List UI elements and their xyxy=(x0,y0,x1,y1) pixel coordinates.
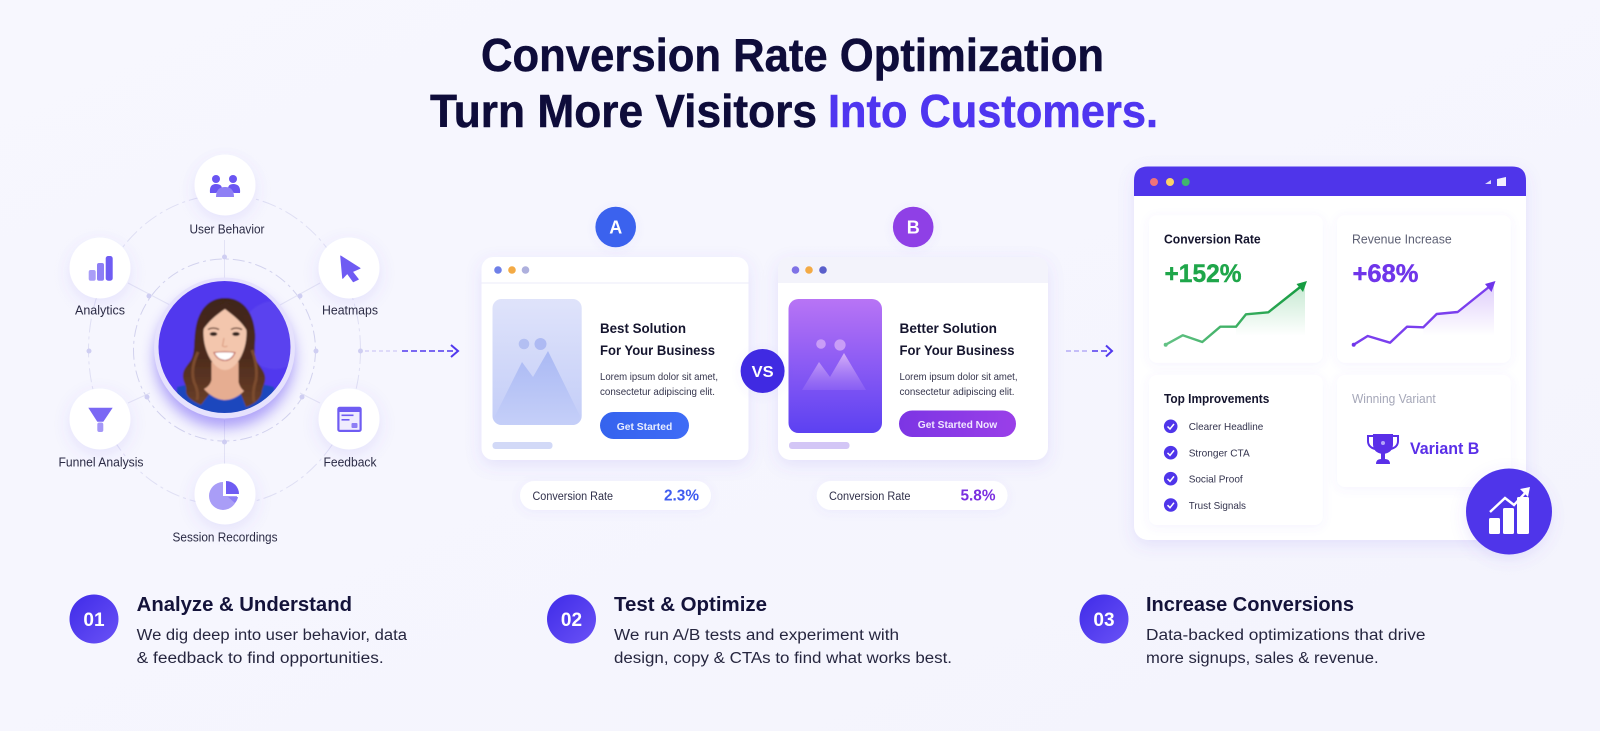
badge: A xyxy=(595,207,636,247)
step 2: Test & Optimize xyxy=(614,594,767,616)
headline A: Best Solution xyxy=(600,320,686,336)
title: Turn More Visitors xyxy=(430,85,817,137)
card: top improvements xyxy=(1149,375,1323,525)
number badge 01: 01 xyxy=(83,610,105,631)
card: revenue increase xyxy=(1337,215,1511,363)
step 3: Data-backed optimizations that drive xyxy=(1146,627,1426,644)
number badge 02: 02 xyxy=(561,610,582,631)
pill: variant A conversion rate xyxy=(520,481,711,510)
icon: feedback form xyxy=(337,407,362,432)
step 3: more signups, sales & revenue. xyxy=(1146,650,1379,667)
card: top improvements: Top Improvements xyxy=(1164,391,1269,406)
panel: variant A card xyxy=(482,257,748,460)
node: feedback: Feedback xyxy=(324,456,377,470)
icon: bars xyxy=(89,256,113,281)
card: winning variant: Variant B xyxy=(1410,439,1479,458)
step 3 xyxy=(1080,594,1426,667)
node: session recordings xyxy=(172,464,278,544)
headline B xyxy=(900,320,1015,358)
badge: A: A xyxy=(609,218,622,238)
step 2 xyxy=(547,594,952,667)
card: winning variant xyxy=(1337,375,1511,487)
step 1 xyxy=(70,594,407,667)
number badge 02 xyxy=(547,594,596,644)
checklist: Social Proof xyxy=(1189,474,1243,486)
arrow: test to results xyxy=(1066,346,1112,356)
number badge 01 xyxy=(70,594,118,644)
chart: revenue growth xyxy=(1352,281,1496,347)
card: conversion rate: +152% xyxy=(1164,260,1242,288)
icon: growth chart badge xyxy=(1466,468,1552,554)
button A: Get Started xyxy=(617,421,672,433)
step 2: design, copy & CTAs to find what works best. xyxy=(614,650,952,667)
pill: variant B conversion rate: Conversion Rate xyxy=(829,491,910,503)
badge: B xyxy=(893,207,934,247)
body text B: Lorem ipsum dolor sit amet, xyxy=(900,371,1018,383)
body text A: consectetur adipiscing elit. xyxy=(600,386,715,398)
number badge 03: 03 xyxy=(1093,610,1115,631)
icon: pie chart xyxy=(209,481,239,510)
badge: VS: VS xyxy=(752,364,774,381)
node: session recordings: Session Recordings xyxy=(172,530,278,544)
icon: trophy xyxy=(1368,434,1398,464)
icon: funnel xyxy=(88,408,113,432)
checklist: Clearer Headline xyxy=(1189,421,1263,433)
node: user behavior xyxy=(190,154,264,236)
card: revenue increase: Revenue Increase xyxy=(1352,232,1452,246)
step 2: We run A/B tests and experiment with xyxy=(614,627,899,644)
body text A xyxy=(600,371,718,398)
badge: VS xyxy=(741,349,785,393)
checklist xyxy=(1164,420,1263,512)
node: funnel analysis xyxy=(58,388,144,470)
node: analytics: Analytics xyxy=(75,304,125,318)
pill: variant A conversion rate: Conversion Rate xyxy=(532,491,613,503)
title: Conversion Rate Optimization xyxy=(481,29,1104,81)
node: heatmaps: Heatmaps xyxy=(322,304,378,318)
node: heatmaps xyxy=(318,238,380,318)
body text B: consectetur adipiscing elit. xyxy=(900,386,1014,398)
headline A: For Your Business xyxy=(600,342,715,358)
checklist: Stronger CTA xyxy=(1189,448,1250,460)
title xyxy=(430,29,1158,137)
headline A xyxy=(600,320,715,358)
headline B: Better Solution xyxy=(900,320,997,336)
dashboard header xyxy=(1134,166,1526,196)
chart: conversion growth xyxy=(1164,281,1307,347)
step 1: Analyze & Understand xyxy=(137,594,352,616)
card: revenue increase: +68% xyxy=(1352,260,1418,288)
panel: variant B card xyxy=(778,257,1048,460)
node: feedback xyxy=(318,388,380,470)
headline B: For Your Business xyxy=(900,342,1015,358)
button B: Get Started Now xyxy=(918,419,998,431)
pill: variant B conversion rate xyxy=(817,481,1008,510)
pill: variant A conversion rate: 2.3% xyxy=(664,488,699,504)
node: analytics xyxy=(70,238,130,318)
image placeholder A xyxy=(492,299,582,425)
checklist: Trust Signals xyxy=(1189,500,1246,512)
body text A: Lorem ipsum dolor sit amet, xyxy=(600,371,718,383)
pill: variant B conversion rate: 5.8% xyxy=(960,488,996,504)
button B xyxy=(899,410,1016,437)
node: user behavior: User Behavior xyxy=(190,222,264,236)
title: Into Customers. xyxy=(828,85,1158,137)
step 1: & feedback to find opportunities. xyxy=(137,650,384,667)
node: funnel analysis: Funnel Analysis xyxy=(58,456,144,470)
card: winning variant: Winning Variant xyxy=(1352,391,1436,406)
step 1: We dig deep into user behavior, data xyxy=(137,627,407,644)
number badge 03 xyxy=(1080,594,1128,644)
button A xyxy=(600,412,689,439)
badge: B: B xyxy=(907,218,920,238)
panel: user research orbit xyxy=(58,154,380,544)
card: conversion rate: Conversion Rate xyxy=(1164,232,1261,246)
arrow: research to test xyxy=(365,345,458,357)
step 3: Increase Conversions xyxy=(1146,594,1354,616)
image placeholder B xyxy=(788,299,882,433)
card: conversion rate xyxy=(1149,215,1323,363)
body text B xyxy=(900,371,1018,398)
icon: cursor xyxy=(341,256,360,282)
icon: users xyxy=(210,175,240,197)
panel: results dashboard xyxy=(1134,166,1526,540)
center portrait xyxy=(150,278,309,428)
